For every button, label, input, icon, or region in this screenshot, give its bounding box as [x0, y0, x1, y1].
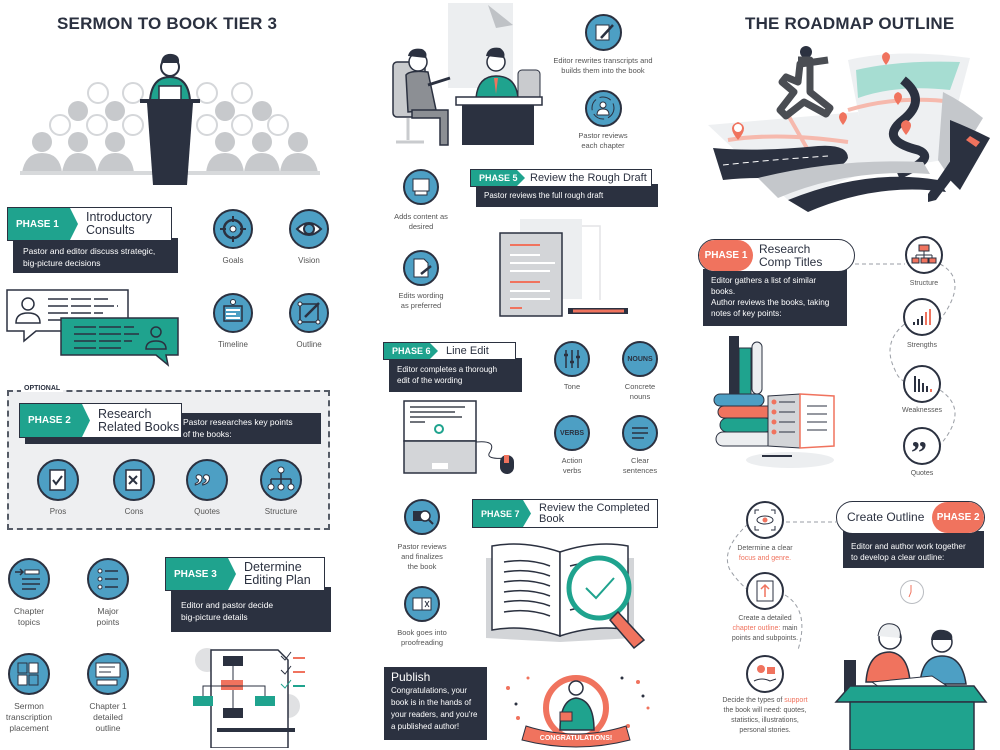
label: pastor reviews and finalizes the book: Pastor reviews — [397, 542, 447, 551]
header: phase 1: PHASE 1 — [16, 218, 59, 230]
header: roadmap phase 1 — [698, 239, 855, 272]
icon: weaknesses — [903, 365, 941, 403]
header: roadmap phase 1: PHASE 1 — [705, 250, 747, 261]
dark box: phase 5 description — [476, 184, 658, 207]
header: phase 5: PHASE 5 — [479, 173, 518, 183]
header: phase 6: Line Edit — [446, 344, 489, 356]
dashed connector line (phase 2) — [726, 522, 838, 649]
header: phase 3: PHASE 3 — [174, 568, 217, 580]
dark box: phase 6 description: edit of the wording — [397, 376, 462, 385]
dark box: roadmap phase 1 description: books. — [711, 287, 735, 296]
label: book goes into proofreading: proofreading — [401, 638, 443, 647]
label: action verbs: Action — [562, 456, 582, 465]
dashed connector line — [855, 264, 956, 445]
label: chapter topics — [14, 606, 44, 627]
label: sermon transcription placement: Sermon — [14, 701, 44, 711]
header: phase 1: Introductory — [86, 210, 152, 224]
header: phase 2: Research — [98, 406, 152, 420]
label: sermon transcription placement: transcription — [6, 712, 52, 722]
label: editor rewrites transcripts: builds them into the book — [561, 66, 645, 75]
label: action verbs — [562, 456, 582, 475]
label: cons: Cons — [125, 507, 143, 516]
label: goals: Goals — [223, 256, 243, 265]
icon: cons — [113, 459, 155, 501]
label: sermon transcription placement — [6, 701, 52, 733]
header: roadmap phase 2: PHASE 2 — [937, 512, 980, 523]
icon: vision — [289, 209, 329, 249]
dark box: phase 2 description: Pastor researches key points — [183, 417, 293, 427]
label: concrete nouns — [625, 382, 655, 401]
label: edits wording as preferred: Edits wording — [398, 291, 444, 300]
illustration: chat bubbles — [6, 289, 179, 367]
panel: optional phase 2 research related books — [7, 390, 330, 530]
header: phase 7 review the completed book: Review the Completed — [539, 502, 650, 514]
icon: proofreading — [404, 586, 440, 622]
header: roadmap phase 1: Comp Titles — [759, 254, 822, 268]
label: pastor reviews and finalizes the book — [397, 542, 447, 571]
title: sermon to book tier 3: SERMON TO BOOK TIER 3 — [57, 14, 277, 33]
label: chapter 1 detailed outline — [89, 701, 127, 733]
dark box: roadmap phase 1 description: Author reviews the books, taking — [711, 298, 829, 307]
label: clear sentences: Clear — [631, 456, 649, 465]
label: adds content as desired: Adds content as — [394, 212, 448, 221]
label: determine a clear focus and genre: Determine a clear — [737, 545, 793, 552]
dark box: phase 6 description: Editor completes a thorough — [397, 365, 497, 374]
label: create a detailed chapter outline: points and subpoints. — [732, 635, 798, 642]
header: phase 7 review the completed book: Book — [539, 512, 564, 524]
dark box: roadmap phase 1 description: Editor gathers a list of similar — [711, 276, 816, 285]
icon: structure (roadmap) — [905, 236, 943, 274]
label: adds content as desired — [394, 212, 448, 231]
panel: phase 1 introductory consults — [7, 207, 178, 273]
header: phase 3: Editing Plan — [244, 573, 311, 587]
dark box: roadmap phase 2 description — [843, 531, 984, 568]
label: decide the types of support: the book will need: quotes, — [724, 707, 806, 714]
label: create a detailed chapter outline — [732, 614, 798, 642]
dark box: phase 1 description: big-picture decisions — [23, 258, 100, 268]
label: timeline: Timeline — [218, 340, 248, 349]
label: structure: Structure — [265, 507, 297, 516]
icon: pastor reviews each chapter — [585, 90, 622, 127]
header: phase 5: Review the Rough Draft — [530, 172, 647, 184]
dark box: phase 2 description — [25, 413, 321, 444]
header: phase 7 review the completed book: PHASE 7 — [481, 508, 520, 518]
header: phase 2 — [19, 403, 182, 438]
illustration: pastor at pulpit with audience — [20, 54, 320, 185]
dark box: phase 2 description: of the books: — [183, 429, 232, 439]
label: structure: Structure — [910, 280, 938, 287]
illustration: editing plan flowchart — [193, 648, 305, 748]
label: pastor reviews each chapter — [578, 131, 628, 150]
label: pros: Pros — [50, 507, 66, 516]
label: pastor reviews and finalizes the book: the book — [408, 562, 436, 571]
label: quotes: Quotes — [194, 507, 220, 516]
icon: pastor reviews and finalizes — [404, 499, 440, 535]
dark box: phase 3 description: big-picture details — [181, 612, 248, 622]
icon: structure — [260, 459, 302, 501]
panel: phase 3 determine editing plan — [165, 557, 331, 632]
icon: support types — [746, 655, 784, 693]
label: outline: Outline — [296, 340, 322, 349]
icon: action verbs — [554, 415, 590, 451]
label: create a detailed chapter outline: chapter outline: main — [732, 625, 798, 632]
panel: roadmap phase 1 research comp titles — [698, 239, 855, 326]
illustration: roadmap with runner — [708, 46, 990, 212]
icon: chapter topics — [8, 558, 50, 600]
header: phase 3 — [165, 557, 325, 591]
header: phase 6: PHASE 6 — [392, 346, 431, 356]
label: edits wording as preferred — [398, 291, 444, 310]
illustration: editor and pastor meeting — [392, 3, 543, 146]
label: editor rewrites transcripts: Editor rewrites transcripts and — [553, 56, 653, 65]
label: chapter 1 detailed outline: Chapter 1 — [89, 701, 127, 711]
label: chapter 1 detailed outline: outline — [95, 723, 121, 733]
illustration: editor and author at desk — [834, 623, 988, 750]
panel: roadmap phase 2 create outline — [836, 501, 985, 568]
icon: sermon transcription placement — [8, 653, 50, 695]
dark box: roadmap phase 2 description: Editor and author work together — [851, 542, 966, 551]
label: strengths: Strengths — [907, 342, 937, 349]
label: decide the types of support — [722, 696, 808, 734]
illustration: congratulations author — [506, 675, 650, 748]
label: chapter topics: Chapter — [14, 606, 44, 616]
illustration: congratulations author: CONGRATULATIONS! — [540, 735, 612, 742]
dark box: phase 1 description: Pastor and editor discuss strategic, — [23, 246, 155, 256]
icon: concrete nouns: NOUNS — [627, 356, 653, 362]
icon: adds content — [403, 169, 439, 205]
label: major points — [97, 606, 120, 627]
label: vision: Vision — [298, 256, 320, 265]
illustration: rough draft document and pencil — [499, 219, 628, 317]
label: weaknesses: Weaknesses — [902, 407, 942, 414]
heading: publish: Publish — [391, 670, 430, 684]
dark box: roadmap phase 2 description: to develop a clear outline: — [851, 553, 944, 562]
header: phase 2: Related Books — [98, 420, 179, 434]
icon: quotes (roadmap) — [903, 427, 941, 465]
header: phase 7 review the completed book — [472, 499, 658, 528]
label: decide the types of support: Decide the types of support — [722, 697, 808, 704]
panel: publish: Congratulations, your book is in the hands of your readers, and you're a published author! — [391, 686, 477, 731]
icon: clear sentences — [622, 415, 658, 451]
icon: tone — [554, 341, 590, 377]
header: phase 2: PHASE 2 — [28, 415, 71, 426]
icon: goals — [213, 209, 253, 249]
header: roadmap phase 2: Create Outline — [847, 510, 924, 524]
dark box: phase 3 description: Editor and pastor decide — [181, 600, 273, 610]
label: book goes into proofreading — [397, 628, 447, 647]
label: determine a clear focus and genre — [737, 544, 793, 562]
header: phase 5 — [470, 169, 652, 187]
label: book goes into proofreading: Book goes into — [397, 628, 447, 637]
label: editor rewrites transcripts — [553, 56, 653, 75]
header: phase 3: Determine — [244, 560, 302, 574]
label: determine a clear focus and genre: focus and genre. — [739, 555, 791, 562]
icon: timeline — [213, 293, 253, 333]
label: concrete nouns: Concrete — [625, 382, 655, 391]
label: sermon transcription placement: placement — [9, 723, 49, 733]
illustration: laptop and mouse — [403, 400, 514, 474]
label: pastor reviews and finalizes the book: and finalizes — [401, 552, 443, 561]
icon: chapter outline — [746, 572, 784, 610]
illustration: open book with magnifier — [486, 543, 645, 649]
dark box: phase 1 description — [13, 238, 178, 273]
icon: editor rewrites — [585, 14, 622, 51]
icon: concrete nouns — [622, 341, 658, 377]
icon: clock — [900, 580, 924, 604]
label: pastor reviews each chapter: Pastor reviews — [578, 131, 628, 140]
icon: pros — [37, 459, 79, 501]
dark box: roadmap phase 1 description — [703, 269, 847, 326]
label: chapter topics: topics — [18, 617, 40, 627]
icon: action verbs: VERBS — [560, 430, 584, 436]
label: chapter 1 detailed outline: detailed — [93, 712, 123, 722]
label: quotes: Quotes — [911, 470, 933, 477]
label: clear sentences — [623, 456, 657, 475]
icon: chapter 1 detailed outline — [87, 653, 129, 695]
illustration: stack of books with open book — [714, 336, 835, 468]
label: pastor reviews each chapter: each chapter — [581, 141, 625, 150]
label: concrete nouns: nouns — [630, 392, 650, 401]
label: tone: Tone — [564, 382, 580, 391]
label: decide the types of support: statistics, illustrations, — [731, 717, 799, 724]
label: adds content as desired: desired — [409, 222, 433, 231]
dark box: phase 6 description — [389, 358, 522, 392]
panel: phase 5 review the rough draft — [470, 169, 658, 207]
header: phase 1: Consults — [86, 223, 135, 237]
icon: edits wording — [403, 250, 439, 286]
label: edits wording as preferred: as preferred — [401, 301, 441, 310]
icon: quotes — [186, 459, 228, 501]
dark box: phase 5 description: Pastor reviews the full rough draft — [484, 191, 603, 200]
label: major points: Major — [97, 606, 119, 616]
header: phase 1 — [7, 207, 172, 241]
dark box: roadmap phase 1 description: notes of key points: — [711, 309, 782, 318]
label: create a detailed chapter outline: Create a detailed — [738, 615, 792, 622]
header: phase 6 — [383, 342, 516, 360]
label: decide the types of support: personal stories. — [739, 727, 791, 734]
header: roadmap phase 1: Research — [759, 242, 810, 256]
icon: major points — [87, 558, 129, 600]
panel: phase 6 line edit — [383, 342, 522, 392]
title: the roadmap outline: THE ROADMAP OUTLINE — [745, 14, 954, 33]
label: optional: OPTIONAL — [24, 385, 60, 392]
icon: outline — [289, 293, 329, 333]
icon: focus and genre — [746, 501, 784, 539]
dark box: phase 3 description — [171, 587, 331, 632]
label: clear sentences: sentences — [623, 466, 657, 475]
icon: strengths — [903, 298, 941, 336]
header: roadmap phase 2 — [836, 501, 985, 534]
label: action verbs: verbs — [563, 466, 581, 475]
label: major points: points — [97, 617, 119, 627]
panel: publish — [384, 667, 487, 740]
